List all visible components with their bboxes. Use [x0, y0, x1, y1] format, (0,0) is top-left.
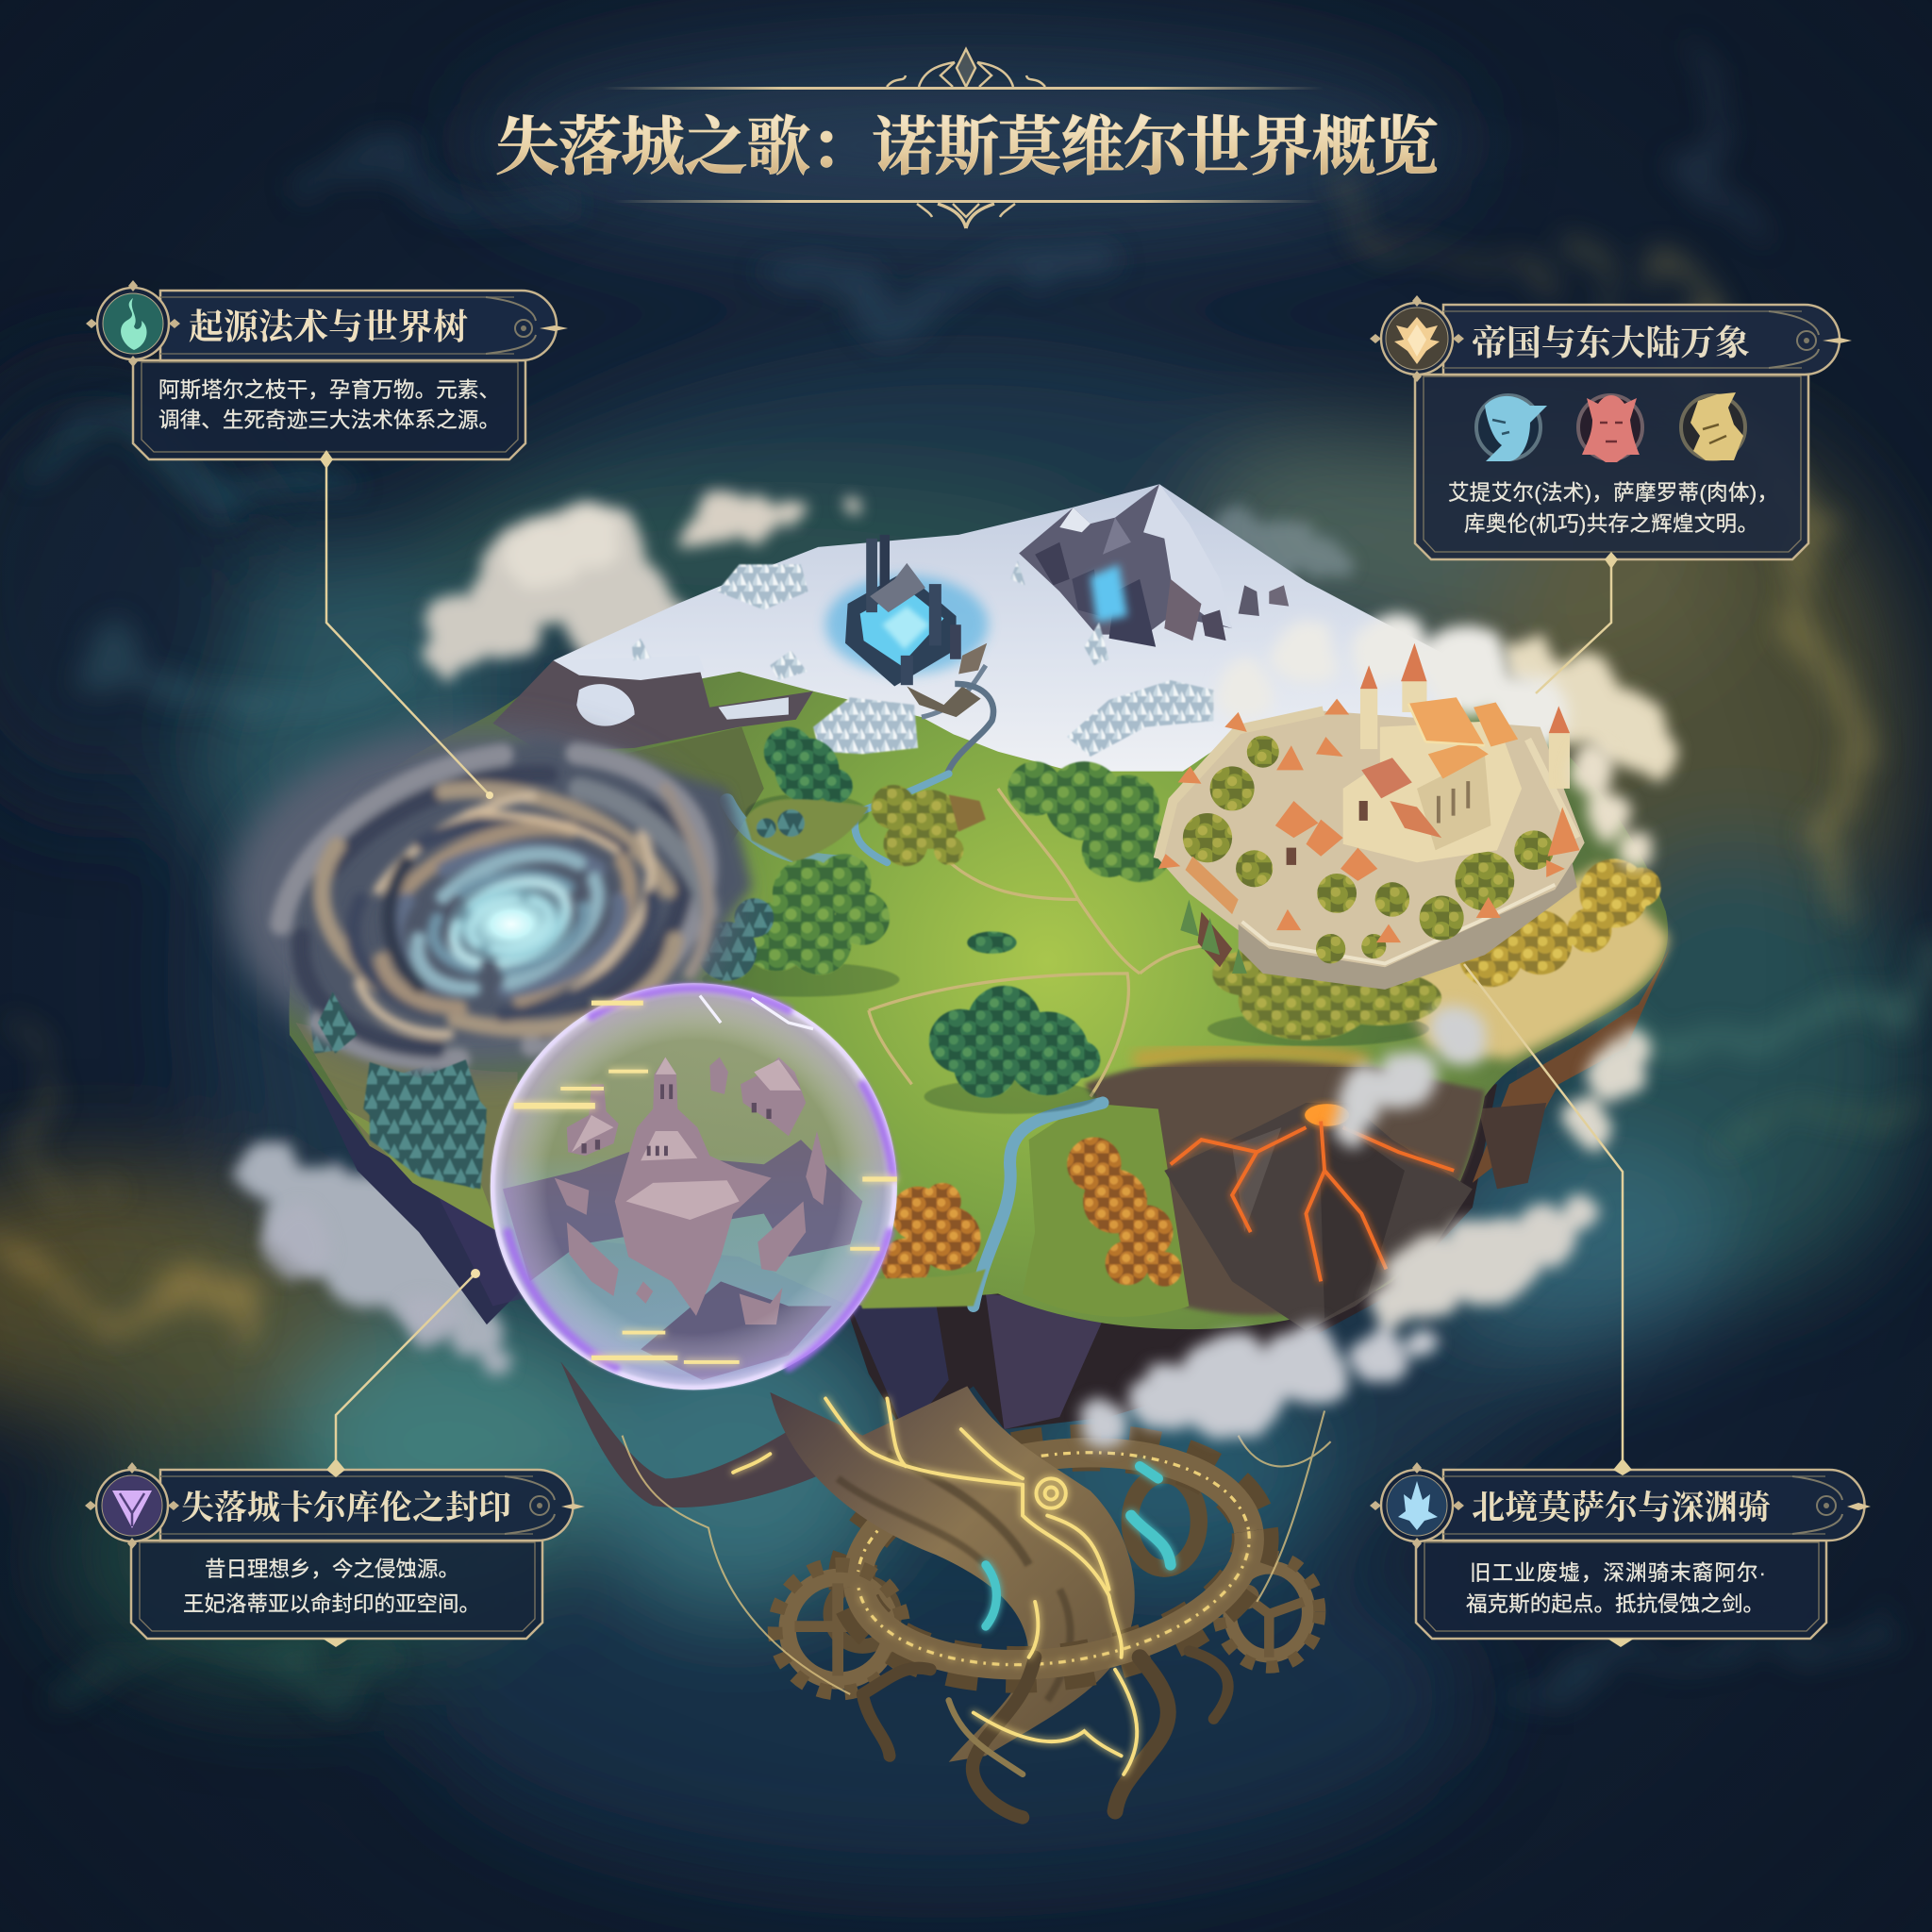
northern river: [946, 684, 993, 776]
gate towers: [1158, 699, 1579, 942]
panel heading bar: [160, 1458, 585, 1541]
panel heading bar: [160, 291, 568, 360]
front clouds: [261, 745, 1656, 1445]
top ornament: [887, 49, 1045, 87]
title block: [362, 49, 1570, 228]
glowing fortress: [825, 535, 989, 717]
body text: [183, 1557, 480, 1616]
connector: sealed city to bubble: [336, 1274, 475, 1470]
lower green plot: [1023, 1103, 1189, 1317]
body text: 旧工业废墟，深渊骑末裔阿尔·: [1470, 1561, 1766, 1585]
roots: [862, 1651, 1228, 1818]
volcano: [1164, 1103, 1473, 1331]
icon: golden lotus: [1370, 295, 1464, 382]
tower cones: [1360, 643, 1570, 733]
western grove ground: [295, 1023, 518, 1232]
main roofs: [1361, 697, 1518, 838]
shadow rock inside bubble: [503, 1140, 862, 1281]
river: [727, 774, 1103, 1306]
body text: 福克斯的起点。抵抗侵蚀之剑。: [1466, 1592, 1764, 1616]
forests: [308, 727, 1661, 1308]
snow pines: [632, 560, 1214, 757]
panel body: [133, 360, 525, 469]
heading text: 失落城卡尔库伦之封印: [181, 1490, 511, 1526]
portrait: golden construct: [1681, 392, 1745, 460]
body text: 王妃洛蒂亚以命封印的亚空间。: [183, 1592, 480, 1616]
portrait: horned warrior: [1578, 395, 1642, 462]
panel heading bar: [1443, 305, 1852, 375]
portrait: elf mage: [1476, 395, 1547, 461]
icon: ice crystal: [1370, 1462, 1464, 1549]
snow region: [492, 484, 1466, 772]
ruined city: [555, 1058, 826, 1324]
world tree: [560, 1361, 1331, 1818]
panel: northern land and abyss knights: [1370, 1458, 1871, 1647]
panel: origin magic and world tree: [86, 280, 568, 469]
icon: violet triangle: [85, 1462, 179, 1549]
land base: [290, 579, 1668, 1329]
thin golden arcs: [623, 1411, 1331, 1694]
body text: [1466, 1561, 1766, 1616]
warm eastern land: [1392, 862, 1668, 1059]
heading text: 起源法术与世界树: [189, 308, 468, 347]
vortex: [228, 700, 752, 1111]
panel body: [1415, 375, 1808, 569]
panel: empire and eastern continent: [1370, 295, 1852, 569]
back clouds: [237, 488, 1674, 1376]
floating island map: [228, 484, 1674, 1818]
cliffs: [293, 949, 1670, 1436]
body text: 调律、生死奇迹三大法术体系之源。: [158, 408, 500, 432]
body text: 艾提艾尔(法术)，萨摩罗蒂(肉体)，: [1448, 481, 1778, 505]
heading text: 北境莫萨尔与深渊骑: [1472, 1490, 1771, 1526]
clouds behind castle: [1217, 616, 1567, 748]
big gear ring front half: [852, 1530, 1270, 1694]
small gears: [775, 1557, 1320, 1693]
olive ground north: [624, 727, 764, 850]
left branch: [560, 1361, 825, 1507]
body text: 阿斯塔尔之枝干，孕育万物。元素、: [158, 378, 500, 402]
connector: origin magic to vortex: [326, 459, 490, 795]
roads: [869, 789, 1220, 1096]
mountain: [1019, 484, 1289, 647]
back gears: [830, 1474, 1199, 1646]
scorched plain: [1084, 1058, 1485, 1315]
golden veins: [733, 1398, 1137, 1774]
connector lines: [326, 459, 1623, 1470]
big gear ring back half: [837, 1423, 1255, 1587]
icon: green flame: [86, 280, 180, 367]
sealed city bubble: [491, 983, 897, 1390]
panel body: [131, 1541, 542, 1647]
connector: north to castle wall: [1464, 964, 1623, 1470]
body text: [1448, 481, 1778, 536]
connector: empire to castle: [1536, 559, 1611, 693]
body text: [158, 378, 500, 432]
panel: sealed lost city: [85, 1458, 585, 1647]
body text: 昔日理想乡，今之侵蚀源。: [205, 1557, 459, 1581]
heading text: 帝国与东大陆万象: [1472, 324, 1750, 363]
castle: [1158, 643, 1585, 990]
body text: 库奥伦(机巧)共存之辉煌文明。: [1464, 512, 1758, 536]
teal groves over vortex edge: [318, 991, 487, 1189]
bottom ornament: [917, 204, 1015, 228]
main title: 失落城之歌：诺斯莫维尔世界概览: [495, 111, 1439, 183]
panel body: [1416, 1541, 1826, 1647]
panel heading bar: [1443, 1458, 1871, 1541]
teal energy: [986, 1466, 1171, 1626]
trunk: [770, 1386, 1135, 1762]
castle shaded walls: [1417, 754, 1491, 850]
